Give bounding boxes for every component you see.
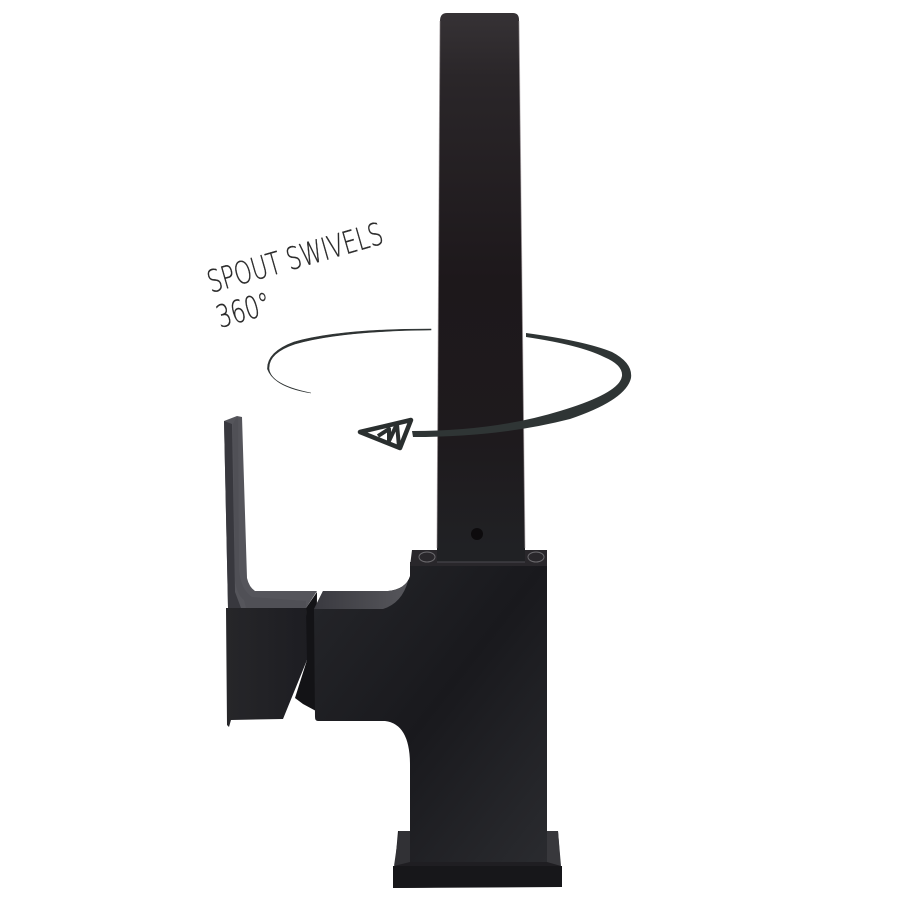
lever cap block [226, 608, 308, 727]
collar [410, 550, 547, 566]
main body [314, 562, 547, 862]
faucet body [314, 528, 562, 888]
spout [437, 13, 525, 548]
spout set-screw hole [471, 528, 483, 540]
swivel arrow: thin back arc [267, 329, 431, 393]
swivel arrowhead [360, 420, 411, 448]
valve shadow between lever and body [295, 592, 317, 711]
arm top facet [314, 581, 408, 609]
swivel arrow: thick front arc [412, 333, 631, 437]
text: 360 degrees: 360° [212, 286, 275, 336]
lever handle [224, 416, 317, 727]
annotation text [203, 216, 387, 336]
flange [393, 831, 562, 888]
text: spout swivels: SPOUT SWIVELS [203, 216, 387, 301]
spout base [437, 548, 525, 562]
lever upright [224, 416, 317, 608]
